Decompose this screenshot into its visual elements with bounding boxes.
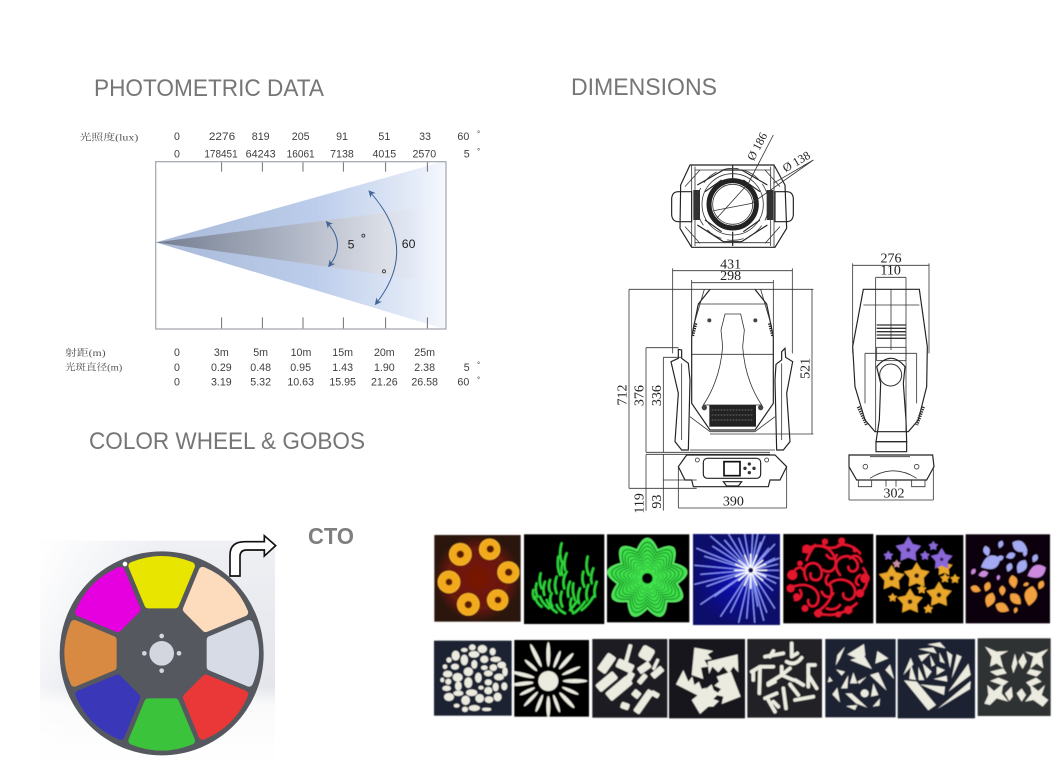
illuminance table: 51	[378, 131, 390, 143]
gobo: leaves	[966, 534, 1050, 623]
distance and spot diameter table: °	[477, 375, 480, 384]
beam cone diagram: 5	[348, 238, 355, 252]
distance and spot diameter table: 3m	[214, 347, 229, 359]
distance and spot diameter table: 5	[464, 362, 470, 374]
illuminance table: 178451	[204, 148, 238, 160]
distance and spot diameter table	[65, 347, 480, 389]
distance and spot diameter table: 10m	[291, 347, 311, 359]
illuminance table: °	[477, 130, 480, 139]
illuminance table: 2276	[209, 131, 235, 143]
distance and spot diameter table: 15m	[332, 347, 353, 359]
dimension drawings	[615, 130, 934, 514]
distance and spot diameter table: 射距(m)	[65, 347, 106, 359]
front view dimension lines: 119	[632, 493, 647, 514]
gobo: white shards	[825, 639, 896, 717]
illuminance table: 0	[174, 148, 180, 160]
illuminance table: 4015	[372, 148, 396, 160]
side view: 110	[880, 264, 901, 279]
illuminance table: 0	[174, 131, 180, 143]
distance and spot diameter table: °	[477, 361, 480, 370]
top view of fixture head	[672, 130, 813, 247]
wheel disc and filters	[60, 551, 264, 755]
distance and spot diameter table: 60	[457, 377, 469, 389]
distance and spot diameter table: 10.63	[287, 377, 314, 389]
gobo: white rose	[898, 639, 975, 718]
front view dimension lines: 521	[798, 358, 813, 379]
distance and spot diameter table: 1.43	[332, 362, 353, 374]
arrow: CTO pointer	[230, 536, 276, 576]
gobo: green wavy star	[607, 534, 689, 622]
distance and spot diameter table: 20m	[374, 347, 395, 359]
beam cone diagram: 60	[402, 237, 416, 251]
front view dimension lines: 712	[615, 385, 630, 405]
distance and spot diameter table: 0	[174, 362, 180, 374]
gobo: blue ray burst	[693, 534, 780, 625]
top view of fixture head: Ø 138	[780, 148, 813, 175]
gobo: white branches	[747, 639, 822, 718]
distance and spot diameter table: 1.90	[374, 362, 395, 374]
distance and spot diameter table: 2.38	[414, 362, 435, 374]
distance and spot diameter table: 光斑直径(m)	[65, 362, 122, 374]
wheel backdrop	[40, 541, 275, 765]
beam cone diagram	[156, 161, 446, 329]
color wheel	[40, 536, 276, 765]
distance and spot diameter table: 0	[174, 347, 180, 359]
gobo: orange rings	[434, 535, 521, 622]
distance and spot diameter table: 26.58	[411, 377, 438, 389]
front view dimension lines: 336	[650, 385, 665, 406]
distance and spot diameter table: 0	[174, 377, 180, 389]
distance and spot diameter table: 5.32	[250, 377, 271, 389]
distance and spot diameter table: 3.19	[211, 377, 232, 389]
distance and spot diameter table: 25m	[414, 347, 435, 359]
illuminance table: 5	[464, 148, 470, 160]
gobo: red ornament	[783, 534, 873, 623]
gobo: white floral	[978, 638, 1051, 716]
top view of fixture head: Ø 186	[744, 130, 770, 163]
front view dimension lines: 93	[650, 495, 665, 509]
gobo: orange and purple stars	[876, 535, 963, 623]
gobo: white pebbles	[434, 641, 512, 716]
side view: 302	[884, 487, 904, 502]
front view dimension lines: 298	[720, 269, 741, 284]
distance and spot diameter table: 0.95	[290, 362, 311, 374]
label: CTO: CTO	[308, 523, 354, 549]
illuminance table: 16061	[287, 148, 315, 160]
distance and spot diameter table: 0.48	[250, 362, 271, 374]
side view	[849, 251, 934, 502]
illuminance table: 819	[252, 131, 270, 143]
gobo photos	[434, 534, 1051, 718]
gobo: white rectangles	[592, 639, 667, 718]
illuminance table: 7138	[330, 148, 354, 160]
distance and spot diameter table: 0.29	[211, 362, 232, 374]
gobo: white jagged blades	[669, 639, 745, 718]
illuminance table: 33	[419, 131, 431, 143]
front view dimension lines: 390	[723, 495, 744, 510]
distance and spot diameter table: 5m	[253, 347, 268, 359]
illuminance table: 光照度(lux)	[79, 131, 138, 143]
distance and spot diameter table: 21.26	[371, 377, 398, 389]
illuminance table: 91	[336, 131, 348, 143]
illuminance table: 205	[292, 131, 310, 143]
front view dimension lines	[615, 257, 813, 514]
illuminance table: °	[477, 147, 480, 156]
illuminance table	[79, 130, 480, 160]
front view with yoke and base	[671, 289, 793, 487]
photometric chart	[65, 130, 480, 389]
heading: color wheel and gobos: COLOR WHEEL & GOBOS	[89, 428, 365, 455]
front view dimension lines: 431	[720, 257, 741, 272]
front view dimension lines: 376	[632, 385, 647, 406]
distance and spot diameter table: 15.95	[329, 377, 356, 389]
heading: dimensions: DIMENSIONS	[571, 74, 717, 101]
gobo: white sun	[512, 640, 589, 717]
illuminance table: 60	[457, 131, 469, 143]
heading: photometric data: PHOTOMETRIC DATA	[94, 75, 324, 102]
illuminance table: 64243	[246, 148, 276, 160]
illuminance table: 2570	[412, 148, 436, 160]
gobo: green flames	[524, 534, 604, 624]
side view: 276	[881, 251, 901, 266]
